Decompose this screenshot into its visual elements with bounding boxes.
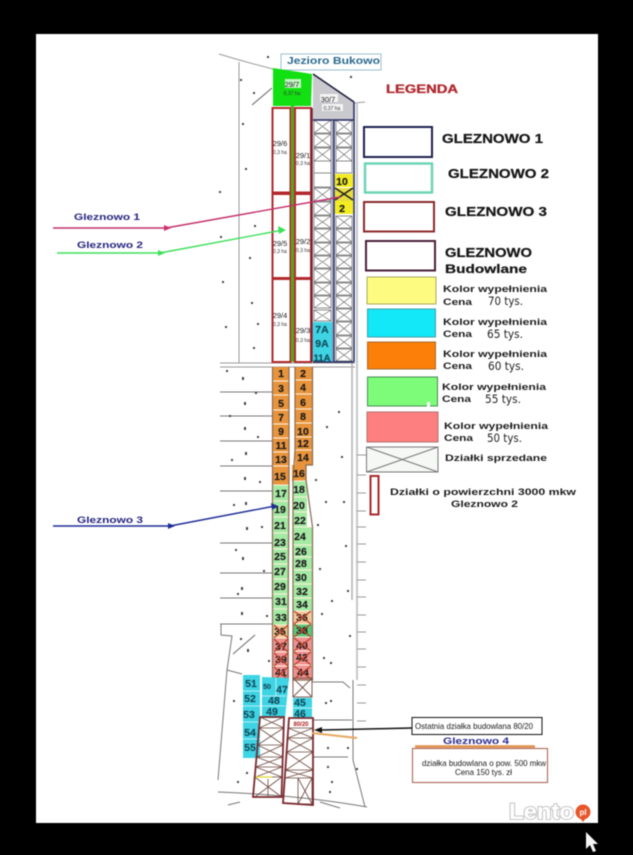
plots: Gleznowo 2 upper: 0,3 ha bbox=[273, 150, 287, 156]
watermark: Lento: Lento bbox=[509, 799, 574, 824]
even numbers: 12 bbox=[297, 438, 309, 450]
cyan plot numbers: 47 bbox=[276, 684, 288, 696]
icon: mouse cursor bbox=[586, 832, 598, 852]
legend: 60 tys: Cena bbox=[443, 361, 473, 372]
legend: 3000 mkw plots: Gleznowo 2 bbox=[451, 499, 518, 510]
plots: Gleznowo 2 upper: 0,3 ha bbox=[296, 338, 310, 344]
even numbers: 38 bbox=[296, 625, 308, 637]
legend: sold plots bbox=[366, 447, 547, 472]
cyan plots: 7A bbox=[315, 324, 329, 336]
yellow plots bbox=[335, 174, 353, 215]
cyan plots: 9A bbox=[315, 338, 329, 350]
cyan plots: 11A bbox=[314, 353, 331, 364]
odd numbers: 27 bbox=[274, 566, 286, 578]
even numbers: 20 bbox=[293, 500, 305, 512]
even numbers: 36 bbox=[296, 612, 308, 624]
plots: Gleznowo 2 upper: 29/5 bbox=[273, 239, 287, 248]
odd numbers: 9 bbox=[278, 426, 284, 438]
legend: Gleznowo 1 bbox=[364, 127, 543, 157]
even numbers: 24 bbox=[294, 531, 306, 543]
odd numbers: 19 bbox=[274, 504, 286, 516]
legend bbox=[364, 82, 577, 514]
cyan plot numbers: 53 bbox=[243, 709, 255, 721]
yellow plots: 10 bbox=[336, 176, 348, 188]
plots: Gleznowo 2 upper: 0,3 ha bbox=[273, 322, 287, 328]
even numbers: 10 bbox=[297, 426, 309, 438]
plots: Gleznowo 2 upper: 0,3 ha bbox=[296, 161, 310, 167]
odd numbers: 31 bbox=[275, 596, 287, 608]
sold plots, left bbox=[314, 120, 331, 321]
even numbers: 2 bbox=[300, 368, 306, 380]
legend: 55 tys bbox=[368, 377, 547, 414]
odd numbers: 21 bbox=[274, 520, 286, 532]
cyan plot numbers: 54 bbox=[244, 727, 256, 739]
legend: 70 tys: Kolor wypełnienia bbox=[443, 284, 548, 295]
even numbers: 14 bbox=[297, 452, 309, 464]
cyan plot numbers: 49 bbox=[266, 706, 278, 718]
odd numbers: 29 bbox=[274, 581, 286, 593]
odd numbers: 13 bbox=[275, 454, 287, 466]
odd numbers: 17 bbox=[275, 488, 287, 500]
plot 29/7: 0,37 ha bbox=[284, 91, 301, 97]
cyan plot numbers: 55 bbox=[244, 742, 256, 754]
even numbers: 44 bbox=[297, 667, 309, 679]
odd numbers: 25 bbox=[274, 551, 286, 563]
plots: Gleznowo 3 lower bbox=[272, 367, 312, 680]
legend: 65 tys: Cena bbox=[443, 329, 473, 340]
arrow: Gleznowo 1 bbox=[53, 197, 340, 231]
callout: Gleznowo 4: działka budowlana o pow. 500 mkw bbox=[422, 758, 547, 768]
legend: Gleznowo Budowlane: GLEZNOWO bbox=[445, 245, 532, 260]
separators and outlines bbox=[273, 380, 312, 666]
callout: Gleznowo 4: Gleznowo 4 bbox=[443, 736, 510, 747]
odd numbers: 33 bbox=[275, 612, 287, 624]
callout: last plot bbox=[314, 718, 542, 734]
odd numbers: 15 bbox=[274, 471, 286, 483]
cyan plot numbers: 50 bbox=[263, 684, 271, 691]
odd numbers: 23 bbox=[274, 537, 286, 549]
even numbers: 42 bbox=[296, 652, 308, 664]
cyan plot numbers: 45 bbox=[294, 697, 306, 709]
left strip bbox=[253, 717, 284, 797]
even numbers: 34 bbox=[296, 599, 308, 611]
legend: 70 tys: 70 tys. bbox=[488, 294, 523, 308]
legend: 60 tys: 60 tys. bbox=[488, 359, 524, 373]
even numbers: 40 bbox=[296, 640, 308, 652]
arrow: Gleznowo 3 bbox=[53, 503, 278, 529]
odd numbers: 11 bbox=[275, 440, 287, 452]
plot 30/7 bbox=[313, 74, 354, 120]
legend: 50 tys: 50 tys. bbox=[487, 431, 522, 445]
odd numbers: 5 bbox=[278, 398, 284, 410]
sold crosses bbox=[274, 611, 311, 680]
even numbers: 4 bbox=[300, 382, 306, 394]
odd numbers: 3 bbox=[278, 383, 284, 395]
odd numbers: 41 bbox=[275, 667, 287, 679]
priced areas bbox=[273, 367, 312, 680]
cyan plot numbers bbox=[243, 678, 306, 754]
callout: last plot: Ostatnia działka budowlana 80/20 bbox=[415, 722, 533, 731]
legend: Gleznowo 2: GLEZNOWO 2 bbox=[448, 166, 549, 181]
legend: 3000 mkw plots bbox=[370, 476, 577, 514]
legend: 60 tys: Kolor wypełnienia bbox=[443, 349, 548, 360]
plots: Gleznowo 2 upper: 29/3 bbox=[296, 326, 310, 335]
legend: 3000 mkw plots: Działki o powierzchni 3000 mkw bbox=[390, 487, 577, 498]
legend: Gleznowo Budowlane bbox=[366, 241, 532, 276]
legend: 50 tys bbox=[367, 412, 549, 445]
plots: Gleznowo 2 upper: 0,3 ha bbox=[296, 248, 310, 254]
plots: Gleznowo 2 upper: 29/4 bbox=[273, 311, 287, 320]
arrow: Gleznowo 2: Gleznowo 2 bbox=[77, 240, 143, 251]
arrow: Gleznowo 1: Gleznowo 1 bbox=[74, 212, 141, 223]
legend: 65 tys: Kolor wypełnienia bbox=[443, 317, 548, 328]
even numbers: 18 bbox=[293, 484, 305, 496]
red strips bbox=[272, 106, 312, 362]
cyan plot numbers: 52 bbox=[244, 693, 256, 705]
odd numbers bbox=[274, 368, 287, 679]
callout: Gleznowo 4: Cena 150 tys. zł bbox=[455, 767, 512, 777]
legend: Gleznowo 3: GLEZNOWO 3 bbox=[445, 204, 547, 219]
odd numbers: 7 bbox=[278, 412, 284, 424]
arrow: Gleznowo 2 bbox=[57, 226, 286, 256]
plot 29/7 bbox=[273, 68, 312, 106]
even numbers: 28 bbox=[295, 558, 307, 570]
sold plots, right bbox=[336, 120, 352, 361]
plot 29/7: 29/7 bbox=[285, 80, 299, 89]
column outlines bbox=[313, 102, 354, 362]
plots: Gleznowo 1 columns bbox=[313, 102, 354, 364]
legend: 70 tys: Cena bbox=[443, 297, 473, 308]
odd numbers: 35 bbox=[274, 626, 286, 638]
even numbers: 26 bbox=[295, 546, 307, 558]
legend: 55 tys: Kolor wypełnienia bbox=[442, 382, 547, 393]
odd numbers: 39 bbox=[275, 654, 287, 666]
plots: cyan block bbox=[243, 675, 312, 758]
callout: Gleznowo 4 bbox=[312, 733, 548, 782]
legend: 60 tys bbox=[368, 342, 548, 373]
plots: Gleznowo 2 upper bbox=[272, 68, 354, 362]
plot 30/7: 30/7 bbox=[321, 95, 335, 104]
cyan plots bbox=[313, 322, 332, 364]
legend: 65 tys bbox=[368, 309, 548, 341]
legend title: LEGENDA bbox=[386, 82, 458, 96]
legend: 65 tys: 65 tys. bbox=[487, 327, 523, 341]
cyan plot numbers: 48 bbox=[268, 695, 280, 707]
cadastral background bbox=[218, 54, 367, 808]
legend: sold plots: Działki sprzedane bbox=[445, 453, 547, 464]
label 80/20: 80/20 bbox=[293, 722, 309, 728]
odd numbers: 1 bbox=[278, 368, 284, 380]
yellow plots: 2 bbox=[339, 203, 345, 215]
cyan plot numbers: 46 bbox=[294, 708, 306, 720]
plot 30/7: 0,37 ha bbox=[324, 106, 341, 112]
legend: Gleznowo 3 bbox=[364, 202, 547, 232]
legend: Gleznowo 2 bbox=[365, 164, 549, 192]
even numbers: 16 bbox=[293, 468, 305, 480]
legend: 50 tys: Kolor wypełnienia bbox=[444, 421, 549, 432]
even numbers bbox=[293, 368, 309, 679]
label: Jezioro Bukowo: Jezioro Bukowo bbox=[287, 56, 380, 67]
legend: 55 tys: Cena bbox=[442, 394, 472, 405]
legend: 55 tys: 55 tys. bbox=[485, 392, 521, 406]
even numbers: 8 bbox=[300, 411, 306, 423]
plots: Gleznowo 2 upper: 29/6 bbox=[273, 139, 287, 148]
plots: Gleznowo 2 upper: 29/1 bbox=[296, 151, 310, 160]
label: Jezioro Bukowo bbox=[281, 54, 381, 70]
odd numbers: 37 bbox=[275, 641, 287, 653]
right strip bbox=[283, 718, 313, 805]
cyan plot numbers: 51 bbox=[245, 678, 257, 690]
even numbers: 22 bbox=[294, 515, 306, 527]
plots: Gleznowo 2 upper: 29/2 bbox=[296, 237, 310, 246]
legend: 70 tys bbox=[367, 277, 548, 308]
watermark: Lento: pl bbox=[579, 808, 587, 817]
legend: Gleznowo Budowlane: Budowlane bbox=[445, 262, 527, 276]
plots: Gleznowo 2 upper: 0,3 ha bbox=[273, 249, 287, 255]
arrow: Gleznowo 3: Gleznowo 3 bbox=[77, 515, 143, 526]
even numbers: 30 bbox=[295, 572, 307, 584]
plots: sold strips at bottom bbox=[253, 717, 313, 805]
even numbers: 6 bbox=[300, 397, 306, 409]
legend: Gleznowo 1: GLEZNOWO 1 bbox=[442, 131, 543, 146]
legend: 50 tys: Cena bbox=[444, 433, 474, 444]
even numbers: 32 bbox=[296, 586, 308, 598]
